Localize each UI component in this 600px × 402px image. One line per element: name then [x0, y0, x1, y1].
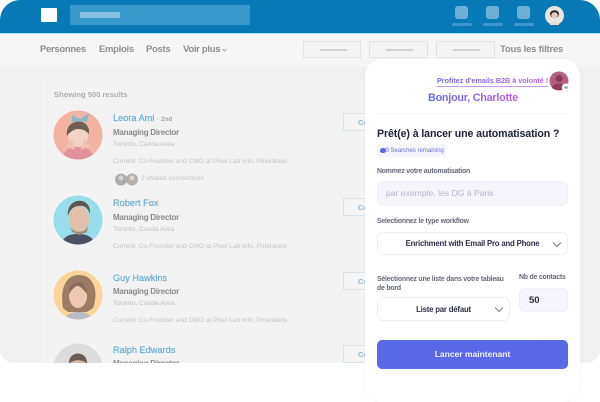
- connect button 1: [343, 113, 383, 131]
- avatar: Guy Hawkins: [54, 270, 102, 320]
- filter button 2: [369, 41, 428, 58]
- nav tab: Personnes: Personnes: [40, 44, 86, 55]
- header icon 1: [455, 6, 468, 19]
- connect button 1: Co: [358, 118, 368, 127]
- field label: contacts: Nb de contacts: [519, 274, 566, 281]
- badge icon: [380, 148, 386, 153]
- dotted separator: [377, 113, 568, 114]
- top header bar: [0, 0, 600, 34]
- name: Leora Ami: Leora Ami · 2nd: [113, 113, 172, 123]
- location: Toronto, Canda Area: [113, 226, 174, 232]
- filter button 1: [303, 41, 361, 58]
- logo: [41, 8, 57, 22]
- connect button 4: [343, 345, 383, 363]
- filter button 3: [436, 41, 495, 58]
- location: Toronto, Canda Area: [113, 140, 174, 148]
- launch button: Lancer maintenant: [435, 349, 510, 359]
- list select: [377, 297, 510, 321]
- greeting: Bonjour, Charlotte: [428, 92, 518, 104]
- results count: Showing 500 results: [54, 90, 127, 99]
- modal panel: [365, 59, 580, 402]
- name input: [377, 181, 568, 206]
- navigation bar: [0, 34, 600, 67]
- job title: Managing Director: [113, 128, 179, 136]
- header icon 2: [486, 6, 499, 19]
- searches remaining badge: [377, 144, 446, 157]
- launch button: [377, 340, 568, 369]
- connect button 2: [343, 198, 383, 216]
- header profile avatar: [545, 6, 564, 25]
- connect button 3: [343, 272, 383, 290]
- header icon 3: [517, 6, 530, 19]
- job title: Managing Director: [113, 212, 179, 222]
- connect button 4: Co: [358, 350, 368, 359]
- search bar: [70, 5, 250, 25]
- avatar: Ralph Edwards: [54, 344, 102, 363]
- nav caret: [222, 47, 227, 52]
- connect button 2: Co: [358, 203, 368, 212]
- name: Robert Fox: Robert Fox: [113, 198, 158, 208]
- location: Toronto, Canda Area: [113, 300, 174, 306]
- list select: Liste par défaut: [416, 305, 471, 314]
- user avatar with badge: [550, 72, 570, 92]
- current position: Current: Co-Founder and CMO at Pixel Lab Info, Pinelabels: [113, 242, 287, 250]
- icon label 2: [483, 23, 503, 26]
- chevron: [553, 239, 561, 247]
- nav tab: Emplois: Emplois: [99, 44, 134, 55]
- icon label 1: [452, 23, 472, 26]
- name input: par exemple, les DG à Paris: [386, 188, 493, 198]
- avatar: Robert Fox: [54, 196, 102, 244]
- all filters link: Tous les filtres: [500, 44, 563, 55]
- searches remaining badge: 0 Searches remaining: [386, 148, 444, 154]
- name: Guy Hawkins: Guy Hawkins: [113, 272, 167, 282]
- icon label 3: [514, 23, 534, 26]
- current position: Current: Co-Founder and CMO at Pixel Lab Info, Pinelabels: [113, 316, 287, 324]
- name: Ralph Edwards: Ralph Edwards: [113, 345, 175, 355]
- current position: Current: Co-Founder and CMO at Pixel Lab Info, Pinelabels: [113, 158, 287, 164]
- job title: Managing Director: [113, 286, 179, 296]
- shared connection avatars: [115, 174, 138, 186]
- nav tab: Posts: Posts: [146, 44, 170, 55]
- nav tab: Voir plus: Voir plus: [183, 44, 220, 55]
- shared connections text: 2 shared connections: [141, 175, 204, 182]
- workflow select: [377, 232, 568, 255]
- results list panel: [42, 81, 382, 363]
- main heading: Prêt(e) à lancer une automatisation ?: [377, 128, 559, 140]
- field label: workflow: Selectionnez le type workflow: [377, 218, 469, 225]
- workflow select: Enrichment with Email Pro and Phone: [406, 239, 539, 248]
- promo link: Profitez d'emails B2B à volonté !: [437, 76, 548, 85]
- contacts input: 50: [529, 295, 540, 306]
- field label: name: Nommez votre automatisation: [377, 168, 470, 175]
- avatar: Leora Ami: [54, 110, 102, 160]
- chevron: [495, 304, 503, 312]
- contacts input: [519, 288, 568, 312]
- field label: list: Sélectionnez une liste dans votre tableau de bord: [377, 276, 504, 292]
- connect button 3: Co: [358, 277, 368, 286]
